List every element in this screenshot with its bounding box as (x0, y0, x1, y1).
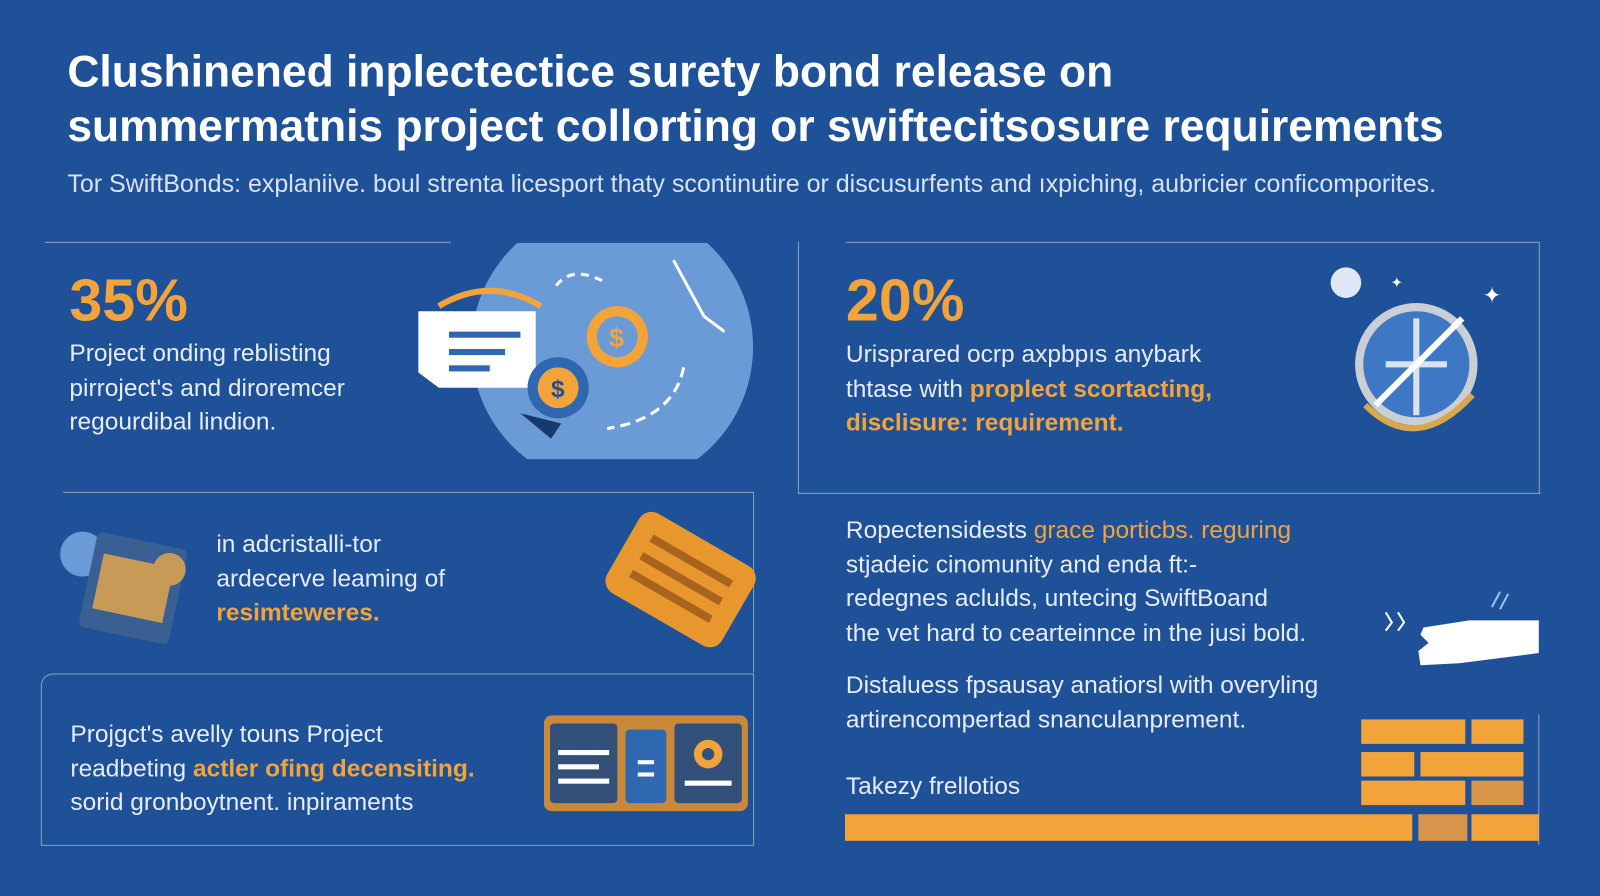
text: 35% description: regourdibal lindion. (69, 408, 276, 436)
icon: hand (1384, 592, 1539, 666)
text block: right middle (846, 516, 1306, 646)
text block: right lower: artirencompertad snanculanprement. (846, 706, 1246, 733)
text: 20% description (846, 341, 1212, 437)
stat 35%: 35% (69, 267, 188, 334)
text: 35% description: pirroject's and diroremcer (69, 374, 345, 402)
panel: middle-left (63, 492, 754, 672)
text: middle-left: resimteweres. (216, 599, 380, 627)
stat 20%: 20% (846, 267, 964, 334)
title (67, 48, 1444, 151)
text block: right middle: the vet hard to cearteinnce in the jusi bold. (846, 619, 1306, 646)
text block: right lower: Distaluess fpsausay anatiorsl with overyling (846, 671, 1318, 699)
text: middle-left (216, 531, 446, 627)
subtitle: Tor SwiftBonds: explaniive. boul strenta licesport thaty scontinutire or discusurfents and ıxpiching, aubricier conficomporites. (67, 170, 1436, 198)
icon: globe seal: ✦ (1483, 283, 1501, 308)
panel: bottom-left (41, 673, 754, 846)
text: bottom-left: readbeting actler ofing decensiting. (70, 755, 475, 782)
text: bottom-left (70, 720, 475, 816)
icon: dashboard (544, 715, 748, 812)
chart: orange brick bars (845, 714, 1540, 845)
title: summermatnis project collorting or swiftecitsosure requirements (67, 102, 1444, 151)
text: bottom-left: Projgct's avelly touns Project (70, 720, 383, 748)
text block: right middle: redegnes aclulds, untecing SwiftBoand (846, 585, 1268, 612)
text: middle-left: ardecerve leaming of (216, 565, 445, 592)
text block: right lower (846, 671, 1318, 733)
illustration: circle with documents and coins (418, 242, 754, 460)
text: 20% description: disclisure: requirement. (846, 409, 1124, 437)
text: 35% description: Project onding reblisting (69, 340, 331, 367)
text: bottom-left: sorid gronboytnent. inpiraments (70, 789, 413, 816)
text: 20% description: thtase with proplect scortacting, (846, 375, 1212, 403)
title: Clushinened inplectectice surety bond release on (67, 48, 1113, 97)
icon: orange keyboard (605, 512, 756, 648)
text: 35% description (69, 340, 345, 436)
panel: top-right stat (798, 242, 1541, 494)
text: takeaway: Takezy frellotios (846, 772, 1020, 800)
icon: globe seal: ✦ (1391, 276, 1403, 292)
text: 20% description: Urisprared ocrp axpbpıs anybark (846, 341, 1201, 368)
text block: right middle: Ropectensidests grace porticbs. reguring (846, 516, 1291, 544)
illustration: circle with documents and coins: $ (551, 376, 565, 403)
illustration: circle with documents and coins: $ (609, 323, 624, 353)
panel: top-left stat (44, 242, 451, 436)
icon: globe seal (1330, 267, 1501, 432)
text block: right middle: stjadeic cinomunity and enda ft:- (846, 551, 1197, 578)
text: middle-left: in adcristalli-tor (216, 531, 381, 558)
icon: printer/machine (60, 532, 187, 644)
